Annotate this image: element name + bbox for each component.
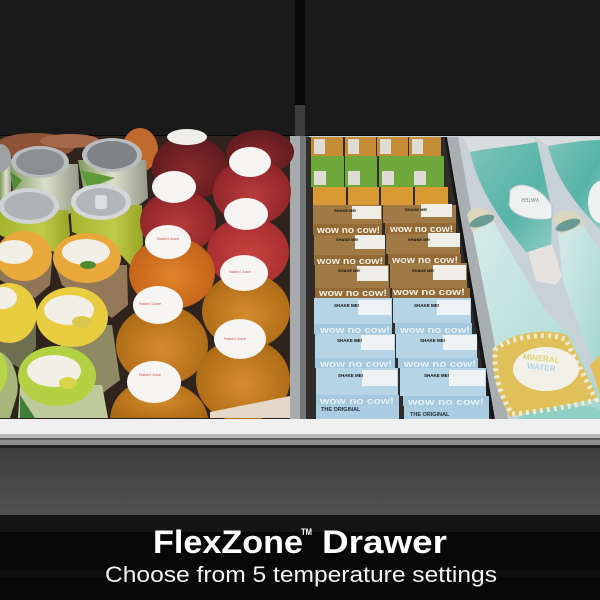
bottle: amber 3 bbox=[196, 319, 290, 422]
blue carton row 2: wow no cow! bbox=[319, 359, 392, 369]
panel: upper fridge doors bbox=[0, 0, 600, 136]
blue carton row 3: wow no cow! bbox=[319, 396, 394, 407]
blue carton row 3: SHAKE ME! bbox=[424, 373, 450, 378]
bottle: orange 1 bbox=[129, 225, 215, 309]
brown carton row 1: SHAKE ME! bbox=[405, 207, 427, 212]
brown carton row 3: SHAKE ME! bbox=[338, 268, 360, 273]
carton group: small cartons bbox=[311, 137, 448, 205]
brown carton row 3 bbox=[315, 263, 470, 298]
brown carton row 3: wow no cow! bbox=[318, 288, 387, 298]
bottle: amber 1 bbox=[202, 255, 290, 349]
yogurt jars bbox=[0, 231, 128, 418]
white can left edge bbox=[0, 144, 12, 202]
blue carton row 2: SHAKE ME! bbox=[420, 338, 446, 343]
blue carton row 3 bbox=[316, 368, 489, 408]
subheading: Choose from 5 temperature settings bbox=[105, 562, 497, 587]
juice bottles bbox=[110, 129, 294, 422]
small carton row: tan bbox=[311, 137, 441, 156]
heading: Drawer bbox=[322, 524, 447, 560]
carton group: blue milk bbox=[314, 298, 489, 419]
bottle: mineral front bbox=[467, 208, 600, 419]
brown carton row 3: wow no cow! bbox=[392, 287, 465, 297]
blue carton row 1: SHAKE ME! bbox=[414, 303, 440, 308]
jar: green left bbox=[0, 352, 18, 418]
blue carton bottom row: THE ORIGINAL bbox=[410, 412, 450, 418]
blue carton row 2: wow no cow! bbox=[403, 359, 476, 369]
small carton row: orange bbox=[313, 187, 448, 205]
bottle: amber 2 bbox=[116, 286, 208, 385]
brown carton row 2: wow no cow! bbox=[316, 256, 383, 266]
bottle: sparkling back left: WATER bbox=[521, 196, 539, 202]
lime can 1 bbox=[0, 188, 70, 252]
bottle: amber 4 bbox=[110, 361, 208, 418]
jar: orange left bbox=[0, 231, 52, 298]
bottle: sparkling back left bbox=[463, 137, 562, 285]
bottle: mineral front right bbox=[553, 211, 600, 395]
brown carton row 2: wow no cow! bbox=[391, 255, 458, 265]
blue carton bottom row: THE ORIGINAL bbox=[321, 407, 361, 413]
brown carton row 2: SHAKE ME! bbox=[336, 237, 358, 242]
lime can 2 bbox=[70, 184, 143, 265]
water bottles bbox=[463, 137, 600, 419]
bottle: red 3 bbox=[207, 198, 289, 287]
small carton labels: green bbox=[314, 171, 426, 185]
brown carton row 1 bbox=[313, 204, 456, 235]
mineral water label: WATER bbox=[527, 362, 556, 373]
small carton labels: tan bbox=[314, 139, 423, 154]
drawer front rim bbox=[0, 419, 600, 448]
blue carton row 1: wow no cow! bbox=[319, 325, 390, 335]
carton group: brown oat milk bbox=[313, 204, 470, 298]
heading: TM bbox=[301, 527, 312, 537]
small carton row: green bbox=[311, 156, 444, 187]
brown carton row 2 bbox=[314, 233, 461, 266]
white can 1 bbox=[10, 146, 80, 215]
jar: yellow left bbox=[0, 283, 37, 368]
mineral water label bbox=[493, 332, 600, 419]
brown carton row 3: SHAKE ME! bbox=[412, 268, 434, 273]
blue carton row 1: SHAKE ME! bbox=[334, 303, 360, 308]
blue carton row 2 bbox=[315, 334, 478, 369]
jar: orange right bbox=[53, 233, 128, 318]
brown carton row 1: wow no cow! bbox=[389, 224, 453, 234]
bottle: red 2 bbox=[140, 171, 216, 254]
panel: dark drawer front bbox=[0, 448, 600, 515]
heading: FlexZone bbox=[153, 524, 303, 560]
panel: right drawer bin background bbox=[300, 136, 600, 420]
bottle: amber 1: Naked Juice bbox=[229, 269, 252, 274]
panel: left drawer bin bbox=[0, 128, 300, 420]
blue carton row 3: wow no cow! bbox=[407, 397, 484, 408]
blue carton bottom row bbox=[316, 405, 489, 419]
mineral water label: MINERAL bbox=[523, 352, 560, 365]
brown carton row 1: SHAKE ME! bbox=[334, 208, 356, 213]
bottle: sparkling back right bbox=[535, 137, 600, 230]
jar: green right bbox=[18, 346, 108, 418]
bottle: dark red back bbox=[152, 129, 294, 200]
bottle: red 1 bbox=[213, 147, 291, 225]
blue carton row 1 bbox=[314, 298, 472, 335]
blue carton row 1: wow no cow! bbox=[399, 325, 470, 335]
bottle: amber 3: Naked Juice bbox=[224, 336, 247, 341]
bottle: orange 1: Naked Juice bbox=[157, 236, 180, 241]
bottle: amber 2: Naked Juice bbox=[139, 301, 162, 306]
bottle: amber 4: Naked Juice bbox=[139, 372, 162, 377]
jar: yellow right bbox=[36, 287, 120, 395]
brown carton row 2: SHAKE ME! bbox=[408, 237, 430, 242]
blue carton row 3: SHAKE ME! bbox=[338, 373, 364, 378]
cans group bbox=[0, 138, 148, 265]
brown carton row 1: wow no cow! bbox=[316, 225, 380, 235]
blue carton row 2: SHAKE ME! bbox=[337, 338, 363, 343]
heading bbox=[153, 524, 447, 560]
white can 2 bbox=[78, 138, 148, 208]
panel: caption band bbox=[0, 515, 600, 600]
